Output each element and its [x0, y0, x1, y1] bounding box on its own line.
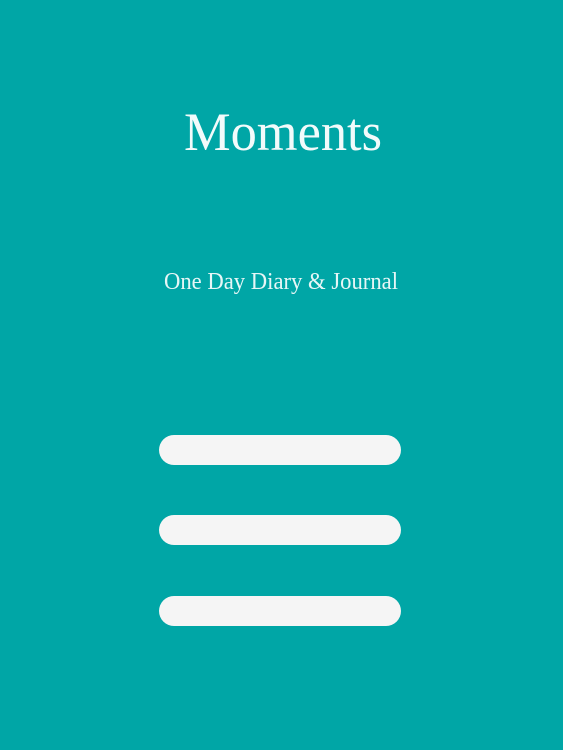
- menu button 2: [159, 515, 401, 545]
- subtitle: One Day Diary & Journal: One Day Diary & Journal: [164, 269, 398, 295]
- menu button 3: [159, 596, 401, 626]
- title: Moments: Moments: [184, 102, 382, 162]
- menu button 1: [159, 435, 401, 465]
